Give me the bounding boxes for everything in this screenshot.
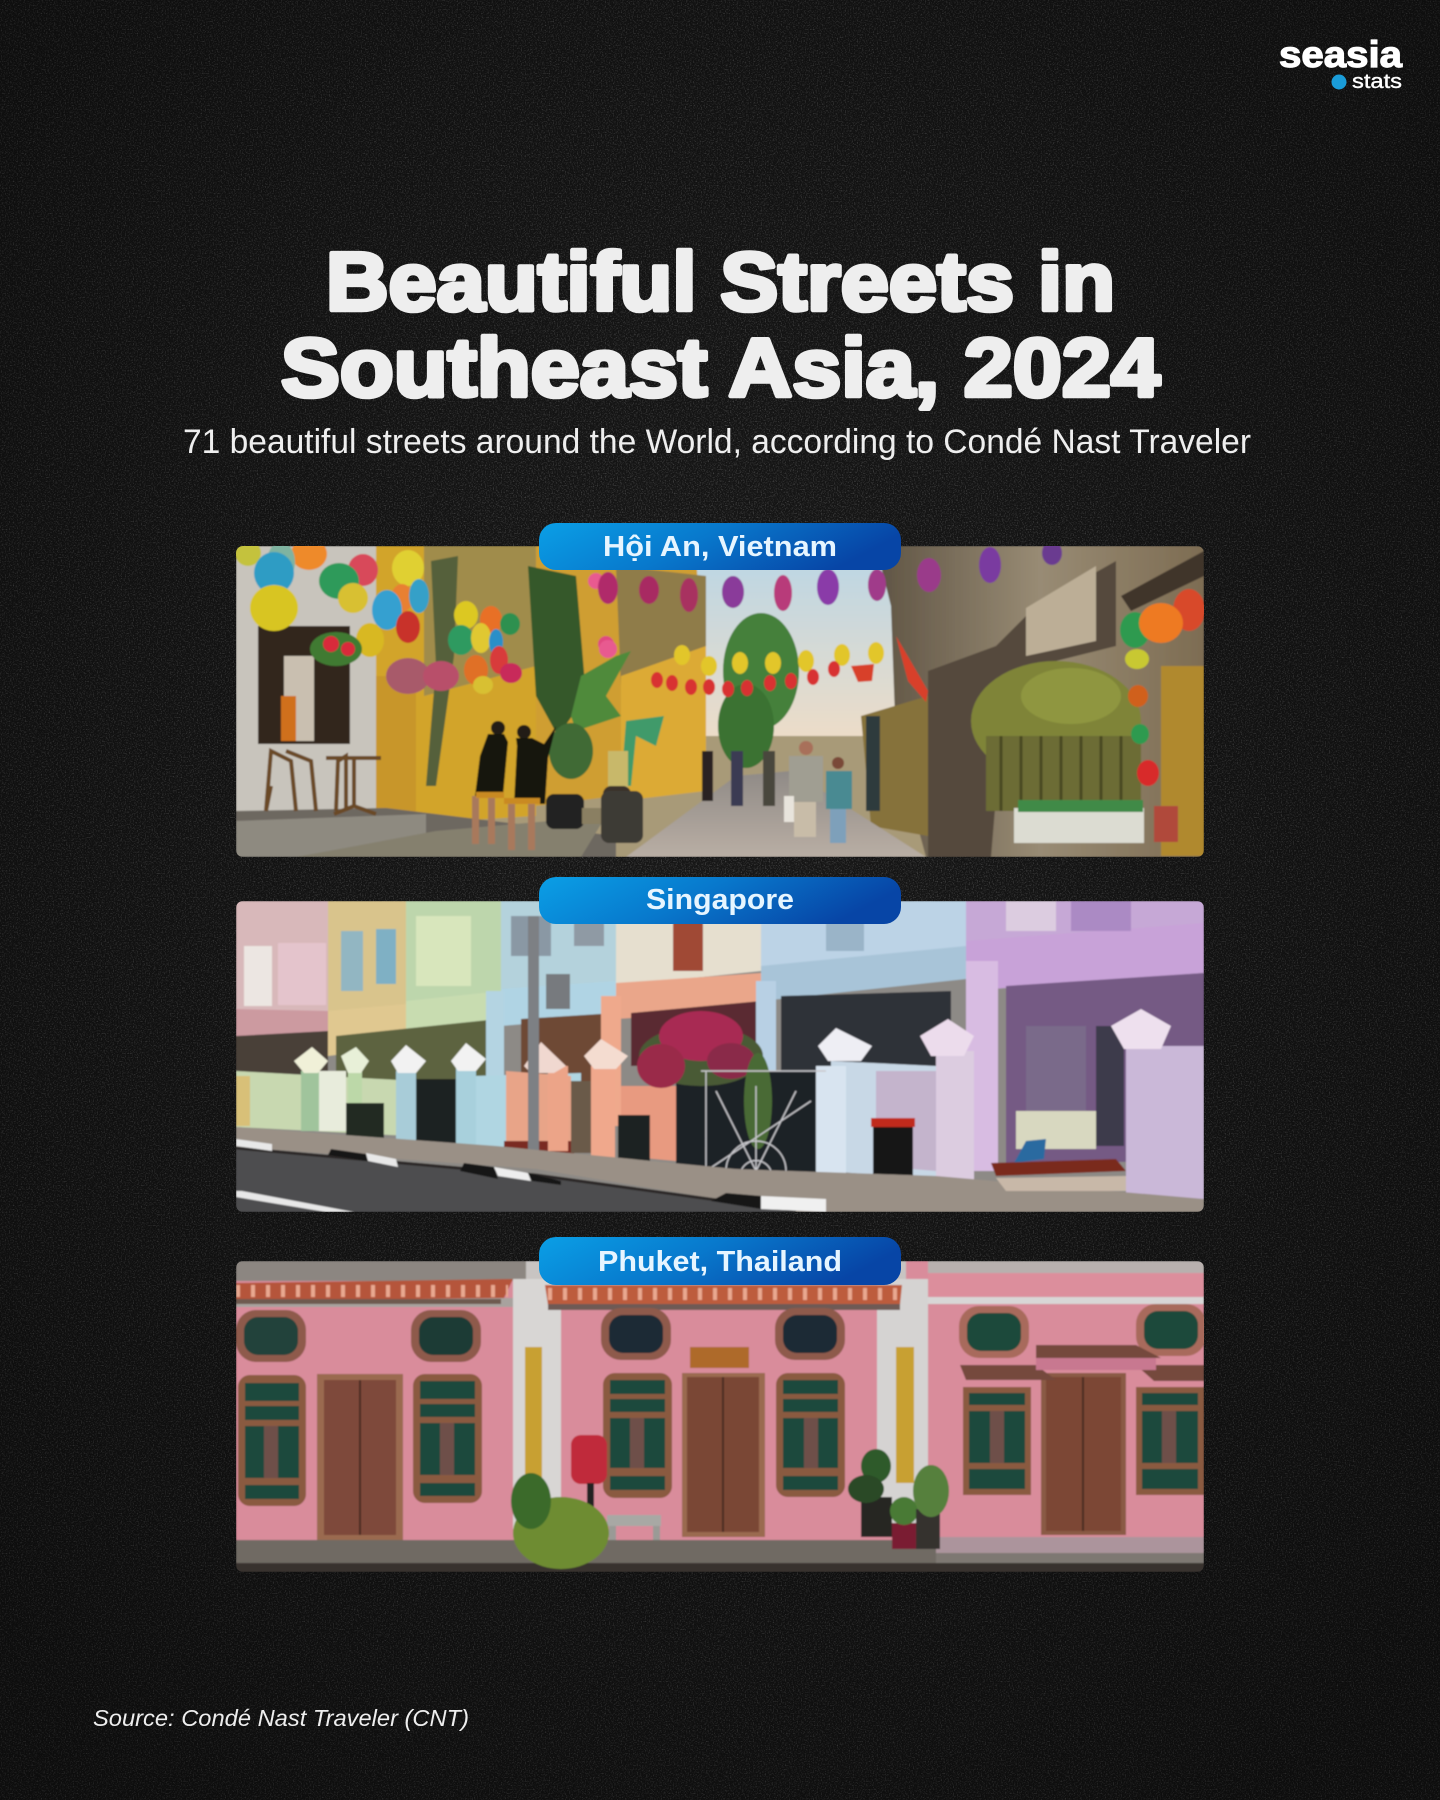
bamboo bbox=[970, 660, 1142, 755]
road bbox=[626, 771, 926, 857]
title: Southeast Asia, 2024 bbox=[281, 321, 1160, 414]
logo: seasia stats: seasia bbox=[1279, 34, 1402, 75]
sky bbox=[696, 570, 896, 737]
fence pillars with caps bbox=[236, 1009, 1204, 1211]
arched windows bbox=[238, 1373, 1204, 1506]
upper eaves bbox=[236, 1261, 1204, 1307]
small tiled canopies bbox=[960, 1345, 1204, 1381]
wooden sign and mailbox bbox=[571, 1347, 749, 1550]
banana plants and planters bbox=[546, 651, 664, 838]
kerb stripes bbox=[236, 1139, 826, 1212]
wheelie bins and street pole bbox=[346, 916, 1096, 1186]
dark verandas bbox=[236, 973, 1204, 1163]
bougainvillea bbox=[637, 1011, 772, 1149]
upper windows bbox=[244, 901, 1131, 1006]
right yellow doorway bbox=[861, 696, 928, 836]
columns bbox=[486, 961, 998, 1171]
centre tree bbox=[723, 613, 799, 729]
label pill: Phuket, Thailand bbox=[539, 1237, 901, 1285]
ornamental quatrefoil windows bbox=[236, 1304, 1206, 1362]
panel: Phuket photo bbox=[236, 1261, 1206, 1572]
panel: Singapore photo bbox=[236, 901, 1204, 1212]
flower baskets bbox=[310, 573, 617, 694]
subtitle: 71 beautiful streets around the World, according to Condé Nast Traveler bbox=[183, 423, 1251, 461]
white pillars bbox=[513, 1279, 928, 1529]
pavement bbox=[236, 1537, 1204, 1572]
title: Beautiful Streets in bbox=[326, 235, 1115, 328]
road bbox=[236, 1149, 796, 1212]
ground left bbox=[236, 808, 616, 857]
label pill: Hoi An, Vietnam bbox=[539, 523, 901, 570]
yellow column bbox=[376, 676, 416, 826]
tiled awnings bbox=[236, 1279, 902, 1310]
shophouse facades bbox=[236, 901, 1204, 1021]
logo: seasia stats: stats bbox=[1352, 71, 1402, 93]
logo: seasia stats bbox=[1279, 34, 1402, 93]
purple lanterns across the sky bbox=[598, 541, 1062, 612]
ground floor colours bbox=[236, 923, 1204, 1061]
red flag bbox=[896, 636, 928, 702]
title bbox=[281, 235, 1160, 414]
yellow buildings left bbox=[376, 546, 536, 826]
label pill: Singapore: Singapore bbox=[646, 884, 794, 916]
red lantern row bbox=[651, 661, 840, 697]
source note: Source: Condé Nast Traveler (CNT) bbox=[93, 1705, 469, 1731]
people walking bbox=[472, 721, 852, 850]
potted plants bbox=[511, 1449, 949, 1569]
label pill: Phuket, Thailand: Phuket, Thailand bbox=[598, 1246, 842, 1278]
door shutters bbox=[258, 626, 350, 744]
sidewalk bbox=[236, 1127, 1204, 1212]
yellow lantern row bbox=[674, 642, 884, 676]
cafe furniture bbox=[266, 751, 381, 814]
left white wall bbox=[236, 546, 386, 816]
right lanterns bbox=[1120, 589, 1205, 786]
right wall bbox=[876, 546, 1204, 857]
hanging lanterns left bbox=[235, 538, 522, 694]
label pill: Hoi An, Vietnam: Hội An, Vietnam bbox=[603, 531, 837, 563]
climbing vines bbox=[528, 566, 586, 736]
wooden doors bbox=[317, 1373, 1126, 1540]
panel: Hoi An photo bbox=[235, 538, 1205, 857]
label pill: Singapore bbox=[539, 877, 901, 924]
wrought iron gate bbox=[701, 1071, 826, 1176]
garden walls bbox=[236, 1061, 936, 1181]
